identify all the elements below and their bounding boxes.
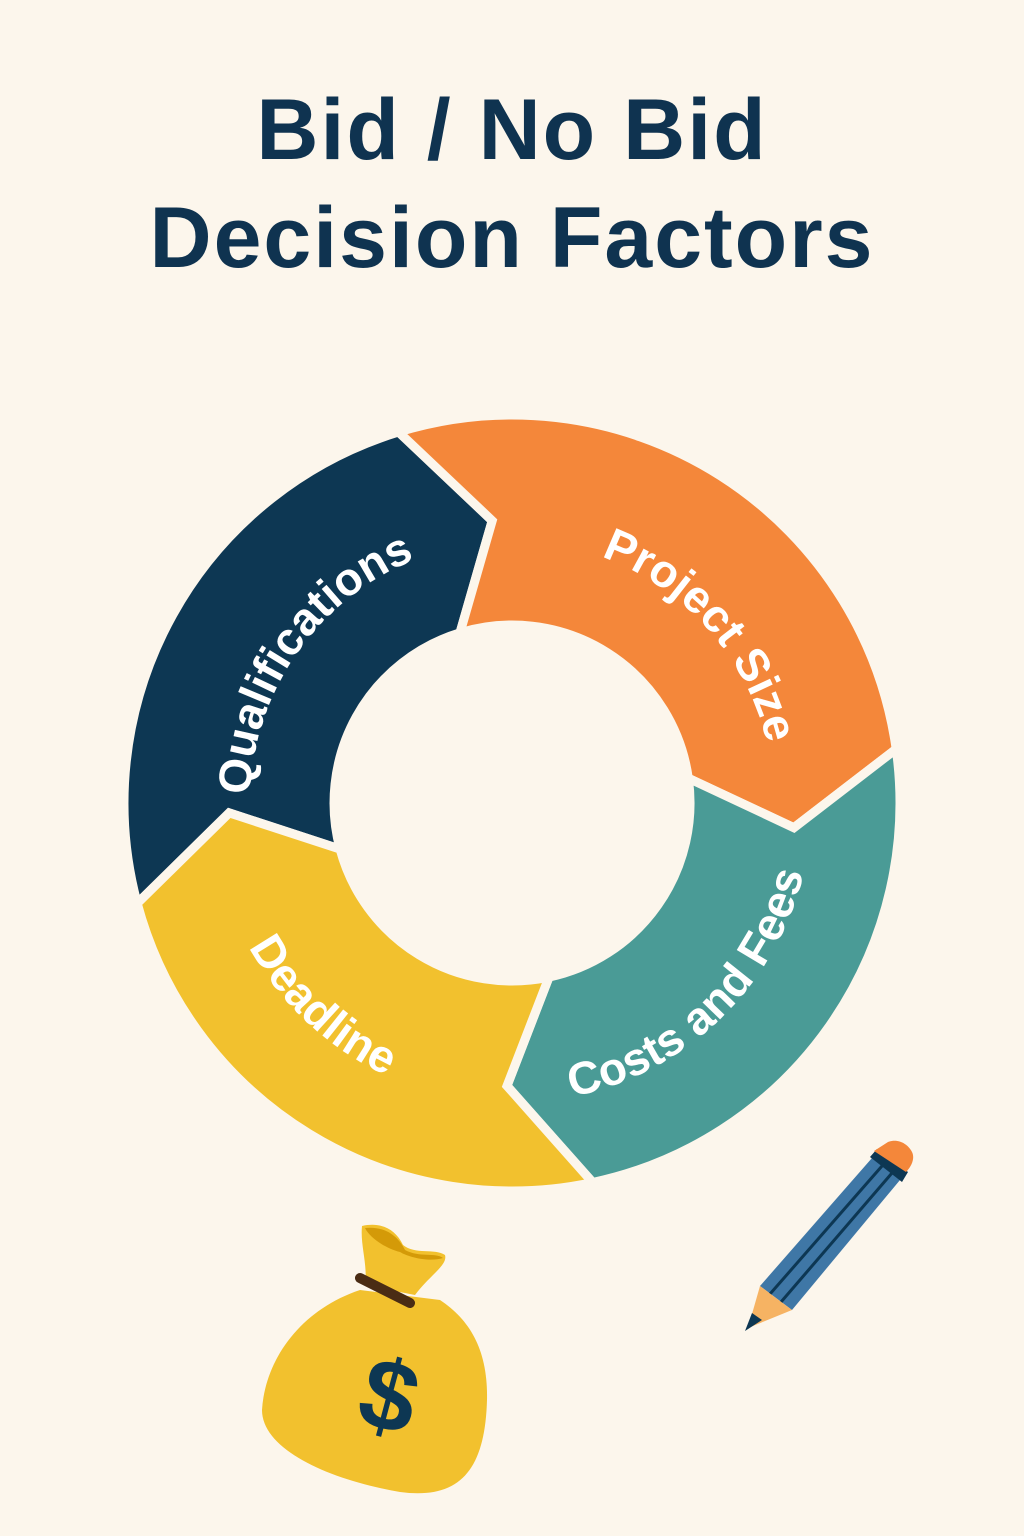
segment: Qualifications: Qualifications (219, 540, 411, 792)
segment: Costs and Fees (512, 747, 896, 1178)
icon: pencil (745, 1141, 913, 1331)
segment: Qualifications (128, 437, 487, 894)
segment: Costs and Fees: Costs and Fees (569, 870, 802, 1094)
segment: Project Size: Project Size (604, 528, 788, 740)
segment: Project Size (397, 420, 892, 822)
cycle diagram (128, 420, 896, 1186)
segment: Deadline (140, 808, 594, 1186)
icon: money bag: $ (348, 1335, 430, 1457)
segment: Deadline: Deadline (250, 933, 393, 1072)
title (150, 82, 874, 286)
title: Bid / No Bid (256, 82, 768, 178)
icon: money bag (262, 1225, 487, 1493)
title: Decision Factors (150, 190, 874, 286)
